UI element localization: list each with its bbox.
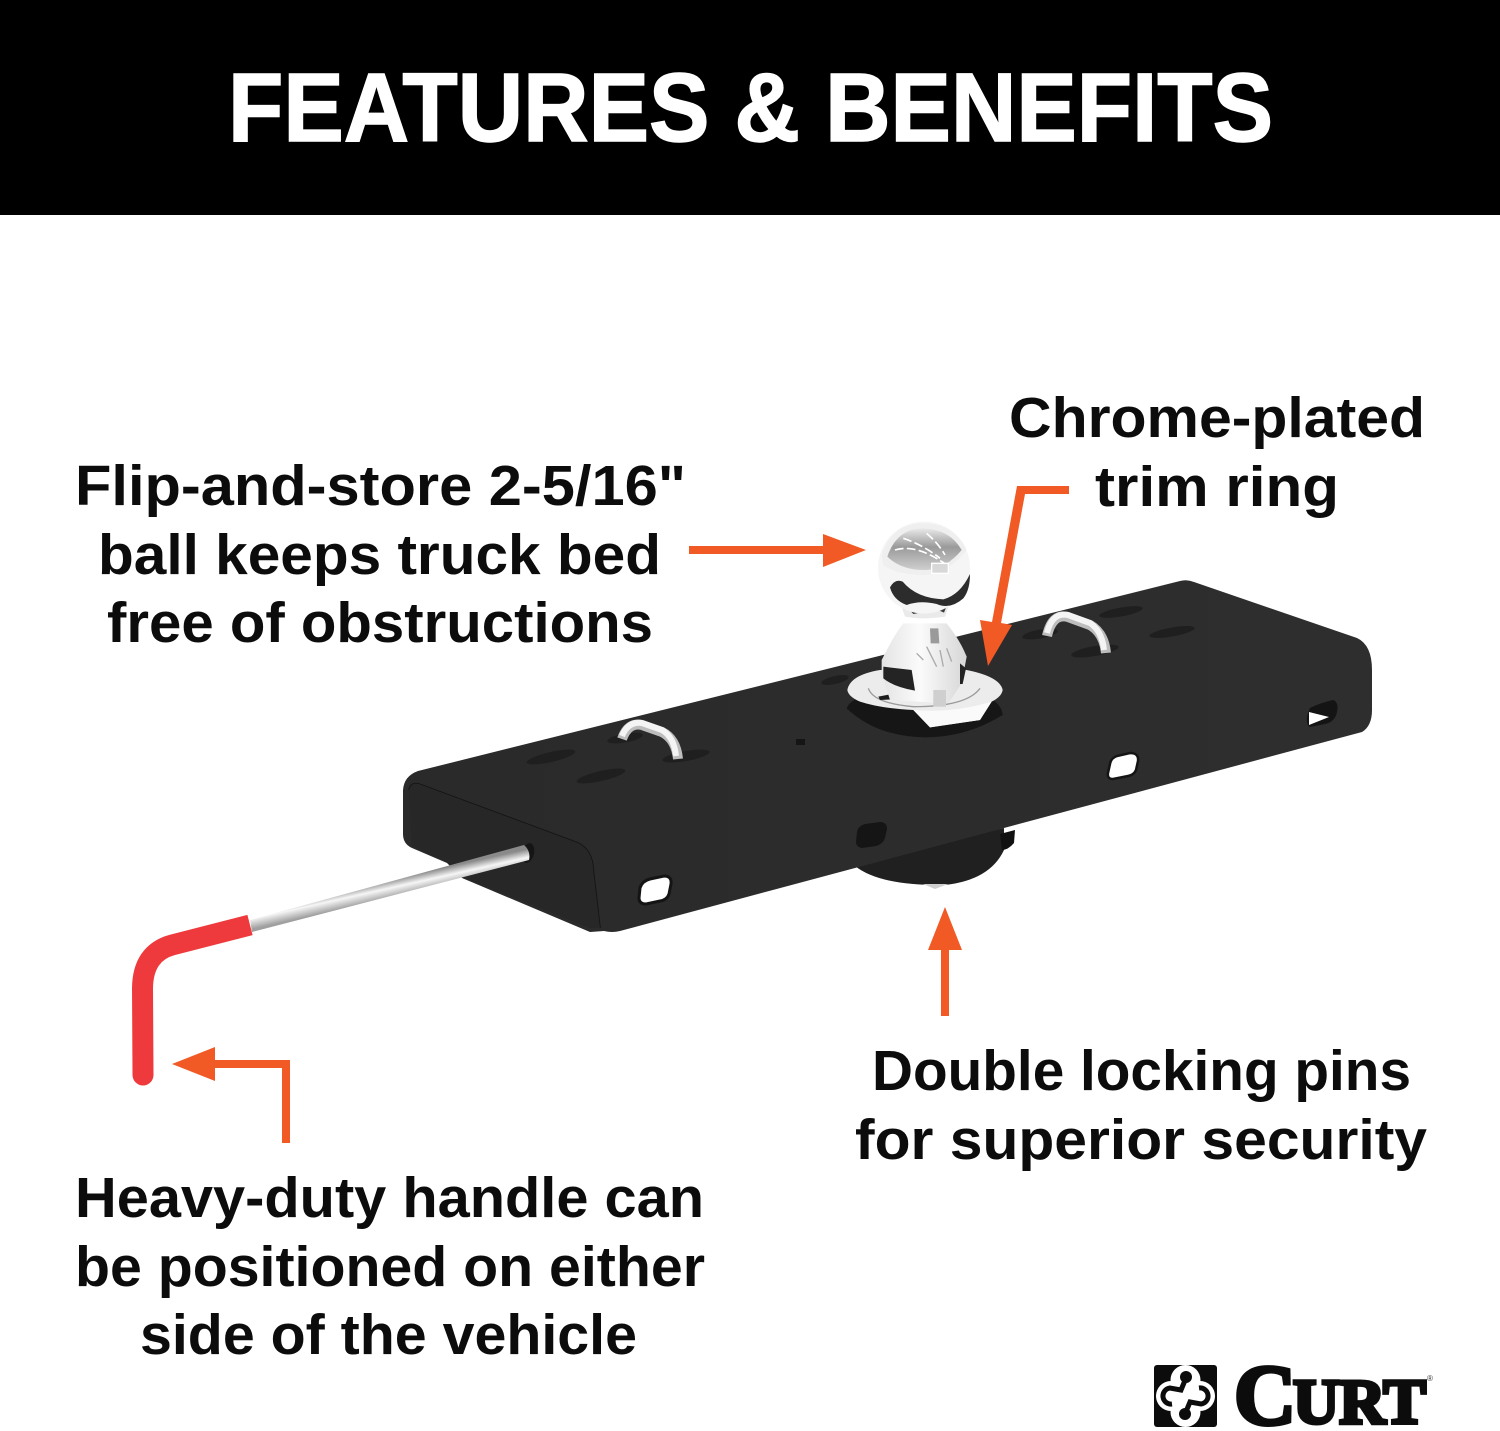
arrow: to handle	[172, 1047, 290, 1143]
side holes	[639, 700, 1338, 904]
callout: trim ring: Chrome-plated	[1009, 386, 1425, 450]
gooseneck hitch product illustration	[132, 522, 1372, 1086]
callout: flip-and-store ball: Flip-and-store 2-5/16"	[75, 454, 686, 518]
recess below ring	[847, 697, 1003, 737]
steel plate	[403, 580, 1372, 932]
callout: handle: be positioned on either	[75, 1235, 705, 1299]
header banner	[0, 0, 1500, 215]
logo emblem	[1154, 1365, 1217, 1427]
callout: handle: side of the vehicle	[140, 1303, 637, 1367]
shank and cone	[882, 623, 967, 703]
registered mark: ®	[1427, 1374, 1433, 1383]
safety chain U-bolts	[622, 615, 1106, 759]
underside receiver	[855, 828, 1015, 889]
callout: flip-and-store ball: free of obstructions	[107, 591, 653, 655]
title: FEATURES & BENEFITS	[228, 53, 1273, 162]
callout: trim ring: trim ring	[1095, 455, 1339, 519]
handle rod	[250, 842, 536, 932]
ball shadow crescent	[890, 574, 970, 606]
callout: locking pins	[855, 1039, 1427, 1172]
arrow: to ball	[689, 534, 866, 567]
callout: handle	[75, 1166, 705, 1367]
neck	[900, 602, 950, 618]
callout: locking pins: Double locking pins	[872, 1039, 1411, 1103]
callout: trim ring	[1009, 386, 1425, 519]
red handle grip	[132, 925, 250, 1086]
CURT logo	[1154, 1347, 1433, 1431]
arrow: to locking pins	[928, 907, 962, 1016]
callout: flip-and-store ball	[75, 454, 686, 655]
chrome ball and trim ring	[847, 522, 1003, 737]
callout: flip-and-store ball: ball keeps truck bed	[98, 523, 661, 587]
top slots	[526, 604, 1195, 786]
ball sphere	[878, 522, 970, 614]
callout: locking pins: for superior security	[855, 1108, 1427, 1172]
end face seam	[409, 784, 600, 928]
callout: handle: Heavy-duty handle can	[75, 1166, 704, 1230]
arrow: to trim ring	[980, 486, 1069, 666]
trim ring	[847, 670, 1003, 727]
